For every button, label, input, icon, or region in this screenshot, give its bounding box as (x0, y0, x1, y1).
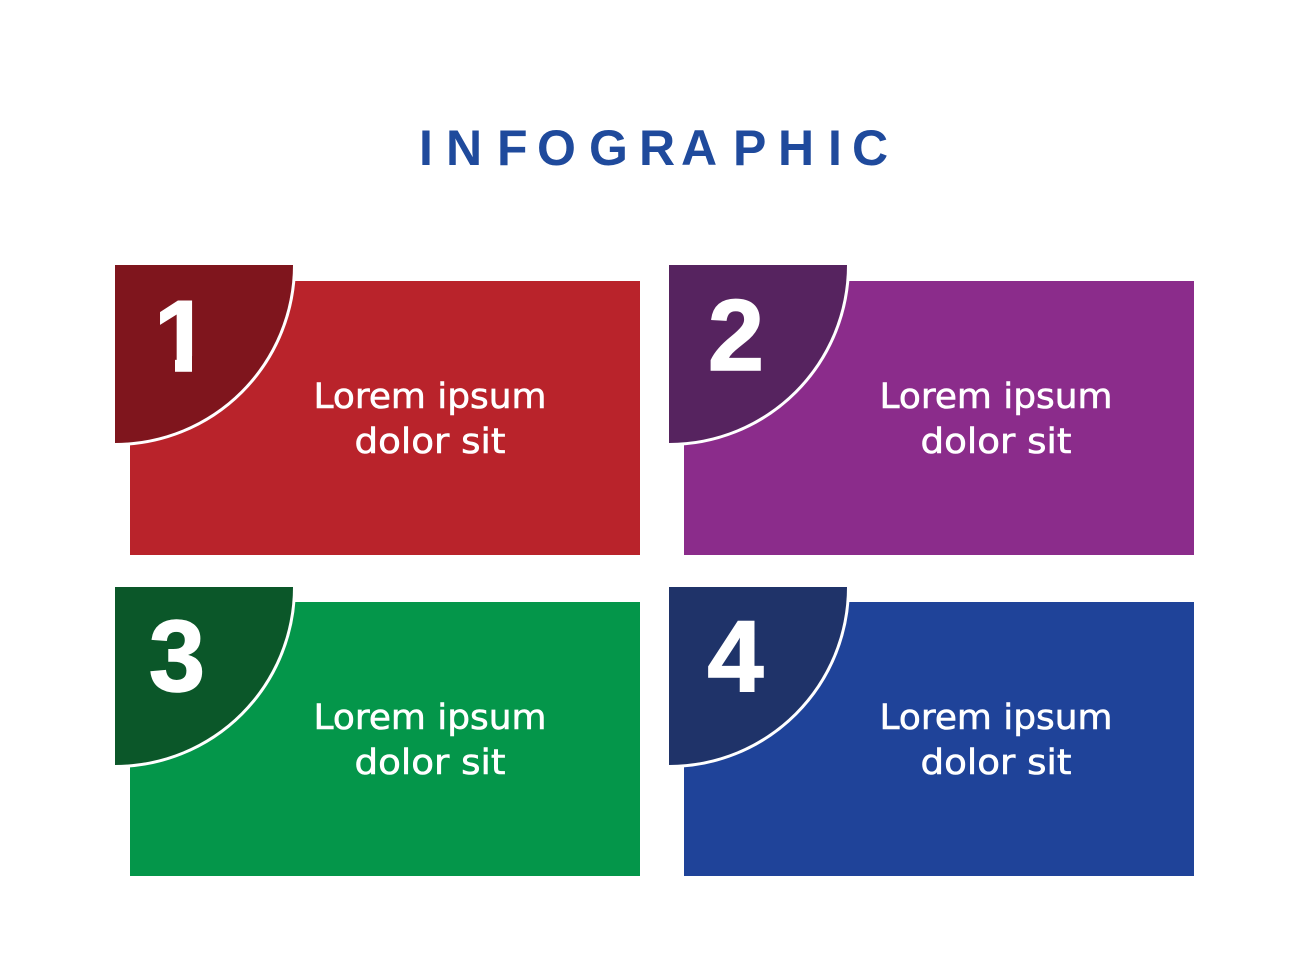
text block 4: dolor sit (920, 743, 1072, 783)
number 1: 1 (154, 281, 210, 393)
text block 1: Lorem ipsum (314, 377, 546, 417)
text block 2: dolor sit (920, 422, 1072, 462)
panel: 1 red (115, 265, 640, 555)
icon: quarter circle 3 (115, 587, 293, 765)
text block 3: Lorem ipsum (314, 698, 546, 738)
number 2: 2 (708, 280, 764, 392)
title: INFOGRAPHIC (419, 120, 888, 176)
icon: quarter circle 4 (669, 587, 847, 765)
text block 3: dolor sit (354, 743, 506, 783)
text block 1: dolor sit (354, 422, 506, 462)
panel: 4 blue (669, 587, 1194, 876)
number 3: 3 (149, 601, 205, 713)
text block 2: Lorem ipsum (880, 377, 1112, 417)
panel: 2 purple (669, 265, 1194, 555)
panel: 3 green (115, 587, 640, 876)
text block 4: Lorem ipsum (880, 698, 1112, 738)
icon: quarter circle 2 (669, 265, 847, 443)
number 4: 4 (707, 601, 764, 713)
icon: quarter circle 1 (115, 265, 293, 443)
